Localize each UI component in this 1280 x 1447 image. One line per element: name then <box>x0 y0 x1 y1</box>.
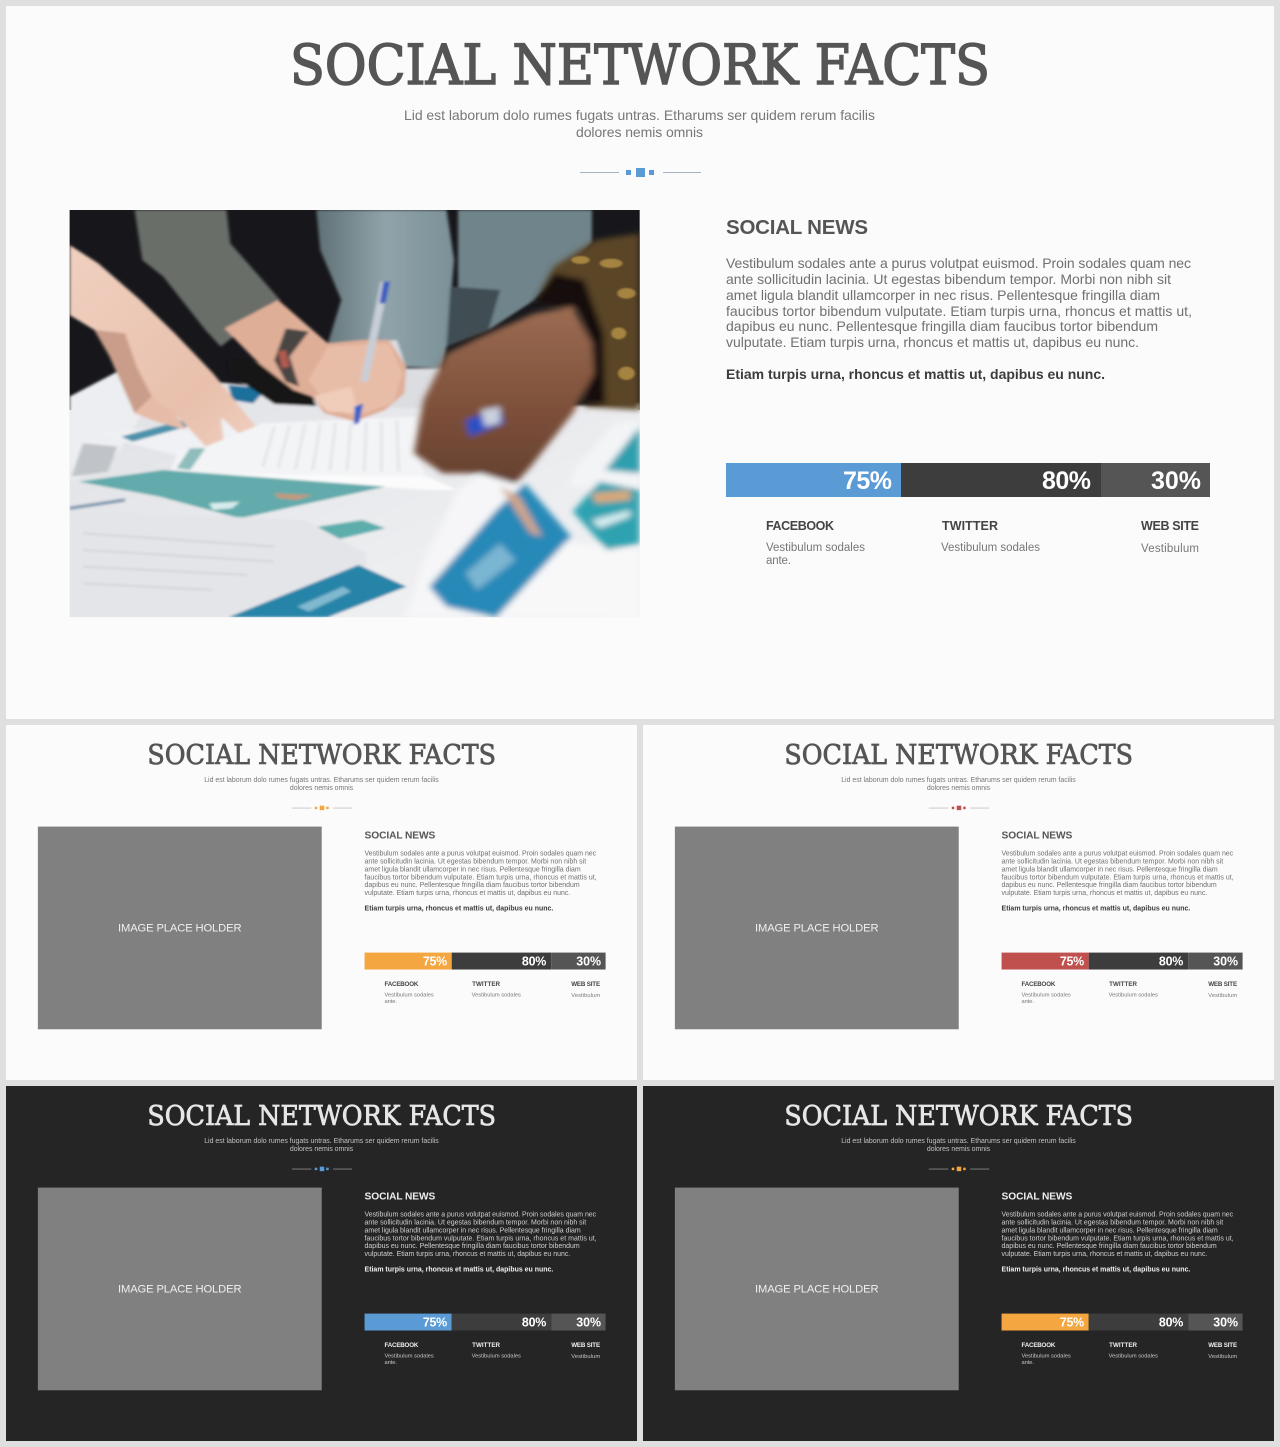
heading: SOCIAL NEWS <box>365 1192 435 1203</box>
image placeholder <box>675 827 959 1029</box>
stacked bar: 75% <box>843 467 892 495</box>
legend: web site: WEB SITE <box>1208 1342 1237 1349</box>
subtitle: dolores nemis omnis <box>576 124 703 140</box>
divider ornament <box>292 1167 352 1171</box>
body paragraph: dapibus eu nunc. Pellentesque fringilla diam faucibus tortor bibendum <box>1002 1243 1217 1250</box>
subtitle <box>204 777 439 792</box>
legend: twitter: Vestibulum sodales <box>472 1353 521 1359</box>
body paragraph: ante sollicitudin lacinia. Ut egestas bibendum tempor. Morbi non nibh sit <box>365 858 586 865</box>
legend: web site: Vestibulum <box>1141 543 1199 555</box>
legend: web site: WEB SITE <box>1141 519 1199 533</box>
body paragraph: vulputate. Etiam turpis urna, rhoncus et mattis ut, dapibus eu nunc. <box>1002 890 1207 897</box>
subtitle: dolores nemis omnis <box>927 1146 991 1153</box>
body paragraph: ante sollicitudin lacinia. Ut egestas bibendum tempor. Morbi non nibh sit <box>1002 858 1223 865</box>
title: SOCIAL NETWORK FACTS <box>147 1101 496 1132</box>
legend: web site <box>571 981 600 999</box>
legend: twitter: TWITTER <box>942 519 998 533</box>
legend: facebook: FACEBOOK <box>1021 1342 1056 1349</box>
legend: web site <box>1141 519 1199 555</box>
slide content: dark blue <box>38 1101 606 1390</box>
legend: facebook: Vestibulum sodales <box>384 1353 434 1359</box>
legend: web site: Vestibulum <box>571 993 600 999</box>
legend: twitter <box>941 519 1040 554</box>
legend: facebook <box>766 519 865 567</box>
bold statement: Etiam turpis urna, rhoncus et mattis ut, dapibus eu nunc. <box>365 906 553 913</box>
body paragraph: Vestibulum sodales ante a purus volutpat euismod. Proin sodales quam nec <box>726 255 1191 271</box>
legend: facebook: Vestibulum sodales <box>1021 1353 1071 1359</box>
legend: facebook: ante. <box>1021 1360 1034 1366</box>
stacked bar: 80% <box>522 1316 546 1330</box>
slide content: dark orange <box>675 1101 1243 1390</box>
legend: web site: Vestibulum <box>571 1354 600 1360</box>
title: SOCIAL NETWORK FACTS <box>290 33 990 97</box>
body paragraph: ante sollicitudin lacinia. Ut egestas bibendum tempor. Morbi non nibh sit <box>1002 1219 1223 1226</box>
body paragraph: faucibus tortor bibendum vulputate. Etiam turpis urna, rhoncus et mattis ut, <box>1002 874 1234 881</box>
slide content: orange <box>38 740 606 1029</box>
subtitle <box>404 107 875 140</box>
legend: facebook <box>384 981 434 1005</box>
body paragraph: Vestibulum sodales ante a purus volutpat euismod. Proin sodales quam nec <box>365 850 597 857</box>
subtitle: dolores nemis omnis <box>290 1146 354 1153</box>
legend: facebook: ante. <box>384 1360 397 1366</box>
legend: twitter: Vestibulum sodales <box>941 542 1040 554</box>
body paragraph: vulputate. Etiam turpis urna, rhoncus et mattis ut, dapibus eu nunc. <box>1002 1251 1207 1258</box>
stacked bar <box>1002 953 1243 970</box>
body paragraph: vulputate. Etiam turpis urna, rhoncus et mattis ut, dapibus eu nunc. <box>726 334 1139 350</box>
subtitle: Lid est laborum dolo rumes fugats untras. Etharums ser quidem rerum facilis <box>204 1138 439 1145</box>
legend: web site: WEB SITE <box>571 981 600 988</box>
body paragraph: amet ligula blandit ullamcorper in nec risus. Pellentesque fringilla diam <box>365 866 581 873</box>
divider ornament <box>580 168 701 177</box>
legend: twitter <box>472 1342 521 1359</box>
bold statement: Etiam turpis urna, rhoncus et mattis ut, dapibus eu nunc. <box>1002 1267 1190 1274</box>
legend: facebook: FACEBOOK <box>384 981 419 988</box>
legend: twitter: TWITTER <box>472 1342 501 1349</box>
legend: facebook: FACEBOOK <box>384 1342 419 1349</box>
bold statement: Etiam turpis urna, rhoncus et mattis ut, dapibus eu nunc. <box>1002 906 1190 913</box>
legend: facebook: FACEBOOK <box>766 519 834 533</box>
image placeholder <box>38 1188 322 1390</box>
image placeholder: IMAGE PLACE HOLDER <box>755 1284 879 1296</box>
body paragraph: dapibus eu nunc. Pellentesque fringilla diam faucibus tortor bibendum <box>365 1243 580 1250</box>
stacked bar: 30% <box>1213 1316 1238 1330</box>
subtitle: Lid est laborum dolo rumes fugats untras. Etharums ser quidem rerum facilis <box>841 1138 1076 1145</box>
heading: SOCIAL NEWS <box>1002 831 1072 842</box>
legend: facebook <box>1021 981 1071 1005</box>
title: SOCIAL NETWORK FACTS <box>784 1101 1133 1132</box>
divider ornament <box>292 806 352 810</box>
body paragraph: amet ligula blandit ullamcorper in nec risus. Pellentesque fringilla diam <box>1002 866 1218 873</box>
stacked bar: 75% <box>423 1316 447 1330</box>
photo: hands writing on papers <box>70 210 640 617</box>
body paragraph: faucibus tortor bibendum vulputate. Etiam turpis urna, rhoncus et mattis ut, <box>365 1235 597 1242</box>
legend: web site: Vestibulum <box>1208 993 1237 999</box>
legend: twitter: TWITTER <box>1109 981 1138 988</box>
legend: twitter <box>472 981 521 998</box>
stacked bar: 30% <box>1213 955 1238 969</box>
legend: web site: WEB SITE <box>571 1342 600 1349</box>
stacked bar: 75% <box>423 955 447 969</box>
stacked bar: 80% <box>1159 1316 1183 1330</box>
image placeholder: IMAGE PLACE HOLDER <box>118 1284 242 1296</box>
body paragraph: faucibus tortor bibendum vulputate. Etiam turpis urna, rhoncus et mattis ut, <box>726 303 1192 319</box>
subtitle <box>841 777 1076 792</box>
legend: facebook: ante. <box>384 999 397 1005</box>
legend: twitter: Vestibulum sodales <box>472 992 521 998</box>
slide: light orange variant <box>6 725 637 1080</box>
body paragraph: faucibus tortor bibendum vulputate. Etiam turpis urna, rhoncus et mattis ut, <box>365 874 597 881</box>
stacked bar: 80% <box>522 955 546 969</box>
body paragraph <box>365 850 597 897</box>
legend: facebook <box>1021 1342 1071 1366</box>
heading: SOCIAL NEWS <box>726 216 868 239</box>
stacked bar: 30% <box>576 955 601 969</box>
stacked bar: 30% <box>1151 467 1201 495</box>
stacked bar <box>726 463 1210 497</box>
body paragraph: amet ligula blandit ullamcorper in nec risus. Pellentesque fringilla diam <box>365 1227 581 1234</box>
legend: twitter: TWITTER <box>472 981 501 988</box>
body paragraph: dapibus eu nunc. Pellentesque fringilla diam faucibus tortor bibendum <box>1002 882 1217 889</box>
slide: main light <box>6 6 1274 719</box>
legend: facebook: Vestibulum sodales <box>1021 992 1071 998</box>
heading: SOCIAL NEWS <box>1002 1192 1072 1203</box>
stacked bar: 80% <box>1042 467 1091 495</box>
legend: facebook: Vestibulum sodales <box>766 542 865 554</box>
subtitle: dolores nemis omnis <box>290 785 354 792</box>
legend: facebook: ante. <box>766 555 791 567</box>
stacked bar <box>365 1314 606 1331</box>
subtitle: Lid est laborum dolo rumes fugats untras. Etharums ser quidem rerum facilis <box>841 777 1076 784</box>
legend: web site <box>1208 1342 1237 1360</box>
body paragraph: amet ligula blandit ullamcorper in nec risus. Pellentesque fringilla diam <box>1002 1227 1218 1234</box>
body paragraph: Vestibulum sodales ante a purus volutpat euismod. Proin sodales quam nec <box>365 1211 597 1218</box>
legend: facebook: Vestibulum sodales <box>384 992 434 998</box>
legend: twitter <box>1109 981 1158 998</box>
bold statement: Etiam turpis urna, rhoncus et mattis ut, dapibus eu nunc. <box>365 1267 553 1274</box>
body paragraph: amet ligula blandit ullamcorper in nec risus. Pellentesque fringilla diam <box>726 287 1160 303</box>
subtitle <box>204 1138 439 1153</box>
legend: facebook: ante. <box>1021 999 1034 1005</box>
legend: web site <box>571 1342 600 1360</box>
legend: facebook <box>384 1342 434 1366</box>
legend: web site: WEB SITE <box>1208 981 1237 988</box>
body paragraph: dapibus eu nunc. Pellentesque fringilla diam faucibus tortor bibendum <box>365 882 580 889</box>
legend: twitter: Vestibulum sodales <box>1109 1353 1158 1359</box>
divider ornament <box>929 1167 989 1171</box>
legend: web site <box>1208 981 1237 999</box>
stacked bar: 80% <box>1159 955 1183 969</box>
stacked bar <box>365 953 606 970</box>
bold statement: Etiam turpis urna, rhoncus et mattis ut, dapibus eu nunc. <box>726 366 1105 382</box>
body paragraph: Vestibulum sodales ante a purus volutpat euismod. Proin sodales quam nec <box>1002 1211 1234 1218</box>
body paragraph <box>1002 850 1234 897</box>
divider ornament <box>929 806 989 810</box>
image placeholder: IMAGE PLACE HOLDER <box>755 923 879 935</box>
subtitle: Lid est laborum dolo rumes fugats untras. Etharums ser quidem rerum facilis <box>404 107 875 123</box>
stacked bar: 75% <box>1060 955 1084 969</box>
slide: light red variant <box>643 725 1274 1080</box>
body paragraph: dapibus eu nunc. Pellentesque fringilla diam faucibus tortor bibendum <box>726 318 1158 334</box>
body paragraph: vulputate. Etiam turpis urna, rhoncus et mattis ut, dapibus eu nunc. <box>365 1251 570 1258</box>
subtitle: dolores nemis omnis <box>927 785 991 792</box>
body paragraph: faucibus tortor bibendum vulputate. Etiam turpis urna, rhoncus et mattis ut, <box>1002 1235 1234 1242</box>
image placeholder: IMAGE PLACE HOLDER <box>118 923 242 935</box>
heading: SOCIAL NEWS <box>365 831 435 842</box>
image placeholder <box>38 827 322 1029</box>
body paragraph: vulputate. Etiam turpis urna, rhoncus et mattis ut, dapibus eu nunc. <box>365 890 570 897</box>
slide content: red <box>675 740 1243 1029</box>
legend: facebook: FACEBOOK <box>1021 981 1056 988</box>
body paragraph <box>1002 1211 1234 1258</box>
slide: dark blue variant <box>6 1086 637 1441</box>
stacked bar <box>1002 1314 1243 1331</box>
body paragraph: ante sollicitudin lacinia. Ut egestas bibendum tempor. Morbi non nibh sit <box>365 1219 586 1226</box>
stacked bar: 30% <box>576 1316 601 1330</box>
body paragraph <box>365 1211 597 1258</box>
image placeholder <box>675 1188 959 1390</box>
body paragraph: Vestibulum sodales ante a purus volutpat euismod. Proin sodales quam nec <box>1002 850 1234 857</box>
subtitle: Lid est laborum dolo rumes fugats untras. Etharums ser quidem rerum facilis <box>204 777 439 784</box>
body paragraph: ante sollicitudin lacinia. Ut egestas bibendum tempor. Morbi non nibh sit <box>726 271 1171 287</box>
body paragraph <box>726 255 1192 350</box>
subtitle <box>841 1138 1076 1153</box>
title: SOCIAL NETWORK FACTS <box>147 740 496 771</box>
legend: web site: Vestibulum <box>1208 1354 1237 1360</box>
legend: twitter <box>1109 1342 1158 1359</box>
slide: dark orange variant <box>643 1086 1274 1441</box>
stacked bar: 75% <box>1060 1316 1084 1330</box>
title: SOCIAL NETWORK FACTS <box>784 740 1133 771</box>
legend: twitter: TWITTER <box>1109 1342 1138 1349</box>
legend: twitter: Vestibulum sodales <box>1109 992 1158 998</box>
